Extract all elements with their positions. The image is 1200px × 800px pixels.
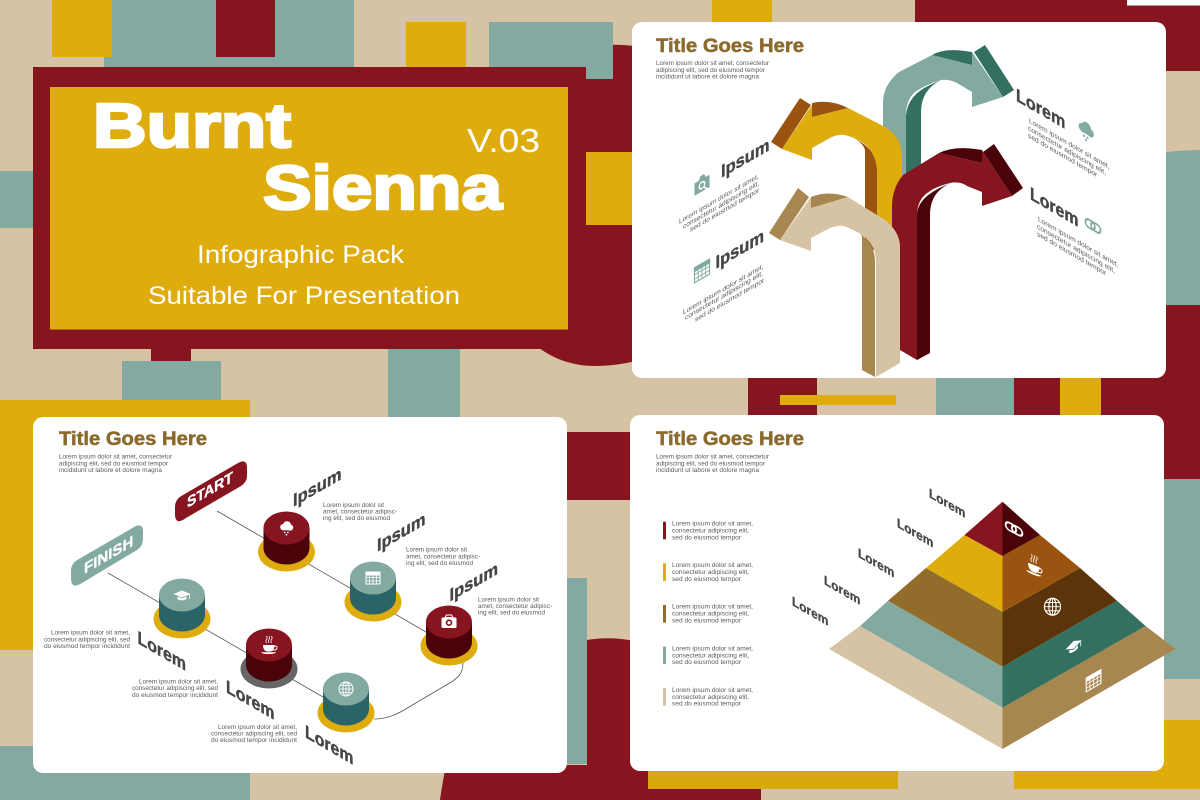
badge: START xyxy=(175,461,247,521)
legend item 2: Lorem ipsum dolor sit amet, xyxy=(672,562,753,569)
text block: Lorem 1 xyxy=(44,630,130,650)
connector lines xyxy=(108,511,463,719)
label: Ipsum lower: Ipsum xyxy=(716,225,764,273)
panel description: adipiscing elit, sed do eiusmod tempor xyxy=(59,460,168,468)
panel title: Title Goes Here xyxy=(59,429,207,450)
legend item 4 xyxy=(663,646,753,666)
label: Ipsum 3: Ipsum xyxy=(450,558,498,606)
text block: Lorem lower: consectetur adipiscing elit, xyxy=(1037,223,1115,275)
text block: Lorem upper: sed do eiusmod tempor xyxy=(1028,132,1098,180)
text block: Ipsum 2: ing elit, sed do eiusmod xyxy=(406,560,473,567)
legend item 4: consectetur adipiscing elit, xyxy=(672,652,749,660)
node: camera xyxy=(420,606,478,666)
legend item 1 xyxy=(663,520,753,542)
panel description: Lorem ipsum dolor sit amet, consectetur xyxy=(656,454,769,461)
label: Lorem 5: Lorem xyxy=(792,593,828,629)
text block: Ipsum lower: Lorem ipsum dolor sit amet, xyxy=(683,263,764,317)
panel title: Title Goes Here xyxy=(656,36,804,57)
panel description: incididunt ut labore et dolore magna xyxy=(656,467,760,474)
panel description xyxy=(59,454,172,474)
arrow: dark red xyxy=(892,144,1023,360)
panel description: Lorem ipsum dolor sit amet, consectetur xyxy=(59,454,172,461)
label: Ipsum 2: Ipsum xyxy=(377,508,425,556)
legend item 5: sed do eiusmod tempor xyxy=(672,700,741,708)
badge: START: START xyxy=(187,468,233,512)
text block: Ipsum 3 xyxy=(478,596,552,616)
heading: Burnt: Burnt xyxy=(93,92,291,161)
panel description: incididunt ut labore et dolore magna xyxy=(656,74,760,80)
label: Ipsum 1: Ipsum xyxy=(293,463,341,511)
legend item 4: sed do eiusmod tempor xyxy=(672,659,741,666)
legend item 3: Lorem ipsum dolor sit amet, xyxy=(672,604,753,610)
icon: camera search xyxy=(694,171,710,196)
legend item 3 xyxy=(663,604,753,624)
text block: Ipsum 2: Lorem ipsum dolor sit xyxy=(406,546,467,554)
node: globe xyxy=(318,672,374,732)
text block: Lorem 1: consectetur adipiscing elit, sed xyxy=(44,636,130,644)
chart: isometric pyramid xyxy=(829,502,1176,749)
panel description: adipiscing elit, sed do eiusmod tempor xyxy=(656,460,765,468)
panel description: Lorem ipsum dolor sit amet, consectetur xyxy=(656,60,769,67)
label: Lorem 2: Lorem xyxy=(897,515,933,551)
icon: link xyxy=(1006,521,1022,537)
node: graduation cap xyxy=(154,578,210,638)
text block: Ipsum upper: Lorem ipsum dolor sit amet, xyxy=(679,173,759,226)
legend item 2: sed do eiusmod tempor xyxy=(672,576,741,583)
legend item 1: consectetur adipiscing elit, xyxy=(672,528,749,534)
icon: coffee cup xyxy=(1026,552,1042,578)
text block: Lorem 2: consectetur adipiscing elit, sed xyxy=(132,685,218,692)
text block: Lorem upper: consectetur adipiscing elit, xyxy=(1028,125,1106,177)
icon: calendar xyxy=(1086,670,1101,692)
tagline: Suitable For Presentation xyxy=(148,282,460,310)
subtitle: Infographic Pack xyxy=(197,241,405,269)
legend item 5: Lorem ipsum dolor sit amet, xyxy=(672,687,753,694)
arrow: tan xyxy=(769,188,900,377)
text block: Ipsum 1 xyxy=(323,502,397,522)
label: Lorem 3: Lorem xyxy=(858,545,894,581)
text block: Lorem 1: do eiusmod tempor incididunt xyxy=(44,643,130,650)
text block: Lorem lower: sed do eiusmod tempor xyxy=(1037,231,1107,278)
legend item 3: sed do eiusmod tempor xyxy=(672,618,741,624)
text block: Ipsum upper: consectetur adipiscing elit, xyxy=(683,180,759,231)
text block: Ipsum 1: amet, consectetur adipisc- xyxy=(323,508,397,516)
text block: Lorem 2 xyxy=(132,678,218,699)
text block: Ipsum 2 xyxy=(406,546,480,567)
main title banner xyxy=(33,67,586,349)
version: V.03 xyxy=(467,122,540,159)
node: coffee cup xyxy=(240,628,298,688)
node: cloud xyxy=(258,512,315,572)
text block: Ipsum 3: ing elit, sed do eiusmod xyxy=(478,610,545,616)
legend item 4: Lorem ipsum dolor sit amet, xyxy=(672,646,753,652)
legend item 1: sed do eiusmod tempor xyxy=(672,534,741,542)
label: Lorem 2: Lorem xyxy=(226,676,274,724)
panel description xyxy=(656,454,769,474)
text block: Lorem 3: consectetur adipiscing elit, sed xyxy=(211,730,297,738)
panel description: incididunt ut labore et dolore magna xyxy=(59,467,163,474)
label: Lorem upper: Lorem xyxy=(1016,84,1065,133)
text block: Lorem 2: Lorem ipsum dolor sit amet, xyxy=(139,678,218,686)
panel: pyramid xyxy=(630,415,1176,771)
legend item 1: Lorem ipsum dolor sit amet, xyxy=(672,520,753,528)
legend item 2: consectetur adipiscing elit, xyxy=(672,569,749,576)
text block: Ipsum lower: sed do eiusmod tempor xyxy=(695,277,765,324)
text block: Lorem 2: do eiusmod tempor incididunt xyxy=(132,692,218,699)
text block: Lorem lower: Lorem ipsum dolor sit amet, xyxy=(1038,216,1119,270)
icon: graduation cap xyxy=(1066,636,1082,657)
icon: cloud xyxy=(1079,118,1094,146)
text block: Ipsum 1: Lorem ipsum dolor sit xyxy=(323,502,384,509)
icon: globe xyxy=(1044,598,1061,615)
text block: Lorem 3 xyxy=(211,724,297,744)
panel description: adipiscing elit, sed do eiusmod tempor xyxy=(656,67,765,74)
text block: Ipsum 2: amet, consectetur adipisc- xyxy=(406,554,480,560)
legend item 5 xyxy=(663,687,753,708)
legend item 2 xyxy=(663,562,753,583)
icon: link xyxy=(1085,218,1101,234)
legend item 3: consectetur adipiscing elit, xyxy=(672,610,749,618)
label: Lorem lower: Lorem xyxy=(1030,183,1078,231)
text block: Lorem 3: Lorem ipsum dolor sit amet, xyxy=(218,724,297,731)
text block: Lorem 3: do eiusmod tempor incididunt xyxy=(211,737,297,744)
label: Lorem 4: Lorem xyxy=(824,572,860,608)
panel: isometric arrows xyxy=(632,22,1166,378)
label: Lorem 3: Lorem xyxy=(305,721,353,769)
arrow: gold xyxy=(771,98,902,260)
text block: Ipsum 3: Lorem ipsum dolor sit xyxy=(478,596,539,604)
arrow: teal xyxy=(883,45,1014,190)
icon: calendar xyxy=(694,259,710,283)
text block: Lorem 1: Lorem ipsum dolor sit amet, xyxy=(51,630,130,636)
legend item 5: consectetur adipiscing elit, xyxy=(672,694,749,701)
panel: start to finish path xyxy=(33,417,567,773)
label: Ipsum upper: Ipsum xyxy=(721,134,769,182)
text block: Ipsum upper: sed do eiusmod tempor xyxy=(690,187,760,234)
panel description xyxy=(656,60,769,80)
badge: FINISH xyxy=(71,525,143,586)
text block: Ipsum 3: amet, consectetur adipisc- xyxy=(478,603,552,610)
panel title: Title Goes Here xyxy=(656,429,804,450)
heading: Sienna: Sienna xyxy=(263,154,503,223)
label: Lorem 1: Lorem xyxy=(138,627,186,675)
label: Lorem 1: Lorem xyxy=(929,485,965,521)
badge: FINISH: FINISH xyxy=(84,532,133,578)
text block: Lorem upper: Lorem ipsum dolor sit amet, xyxy=(1029,118,1110,171)
node: calendar xyxy=(344,562,402,622)
text block: Ipsum lower: consectetur adipiscing elit, xyxy=(685,270,763,322)
text block: Ipsum 1: ing elit, sed do eiusmod xyxy=(323,515,390,522)
